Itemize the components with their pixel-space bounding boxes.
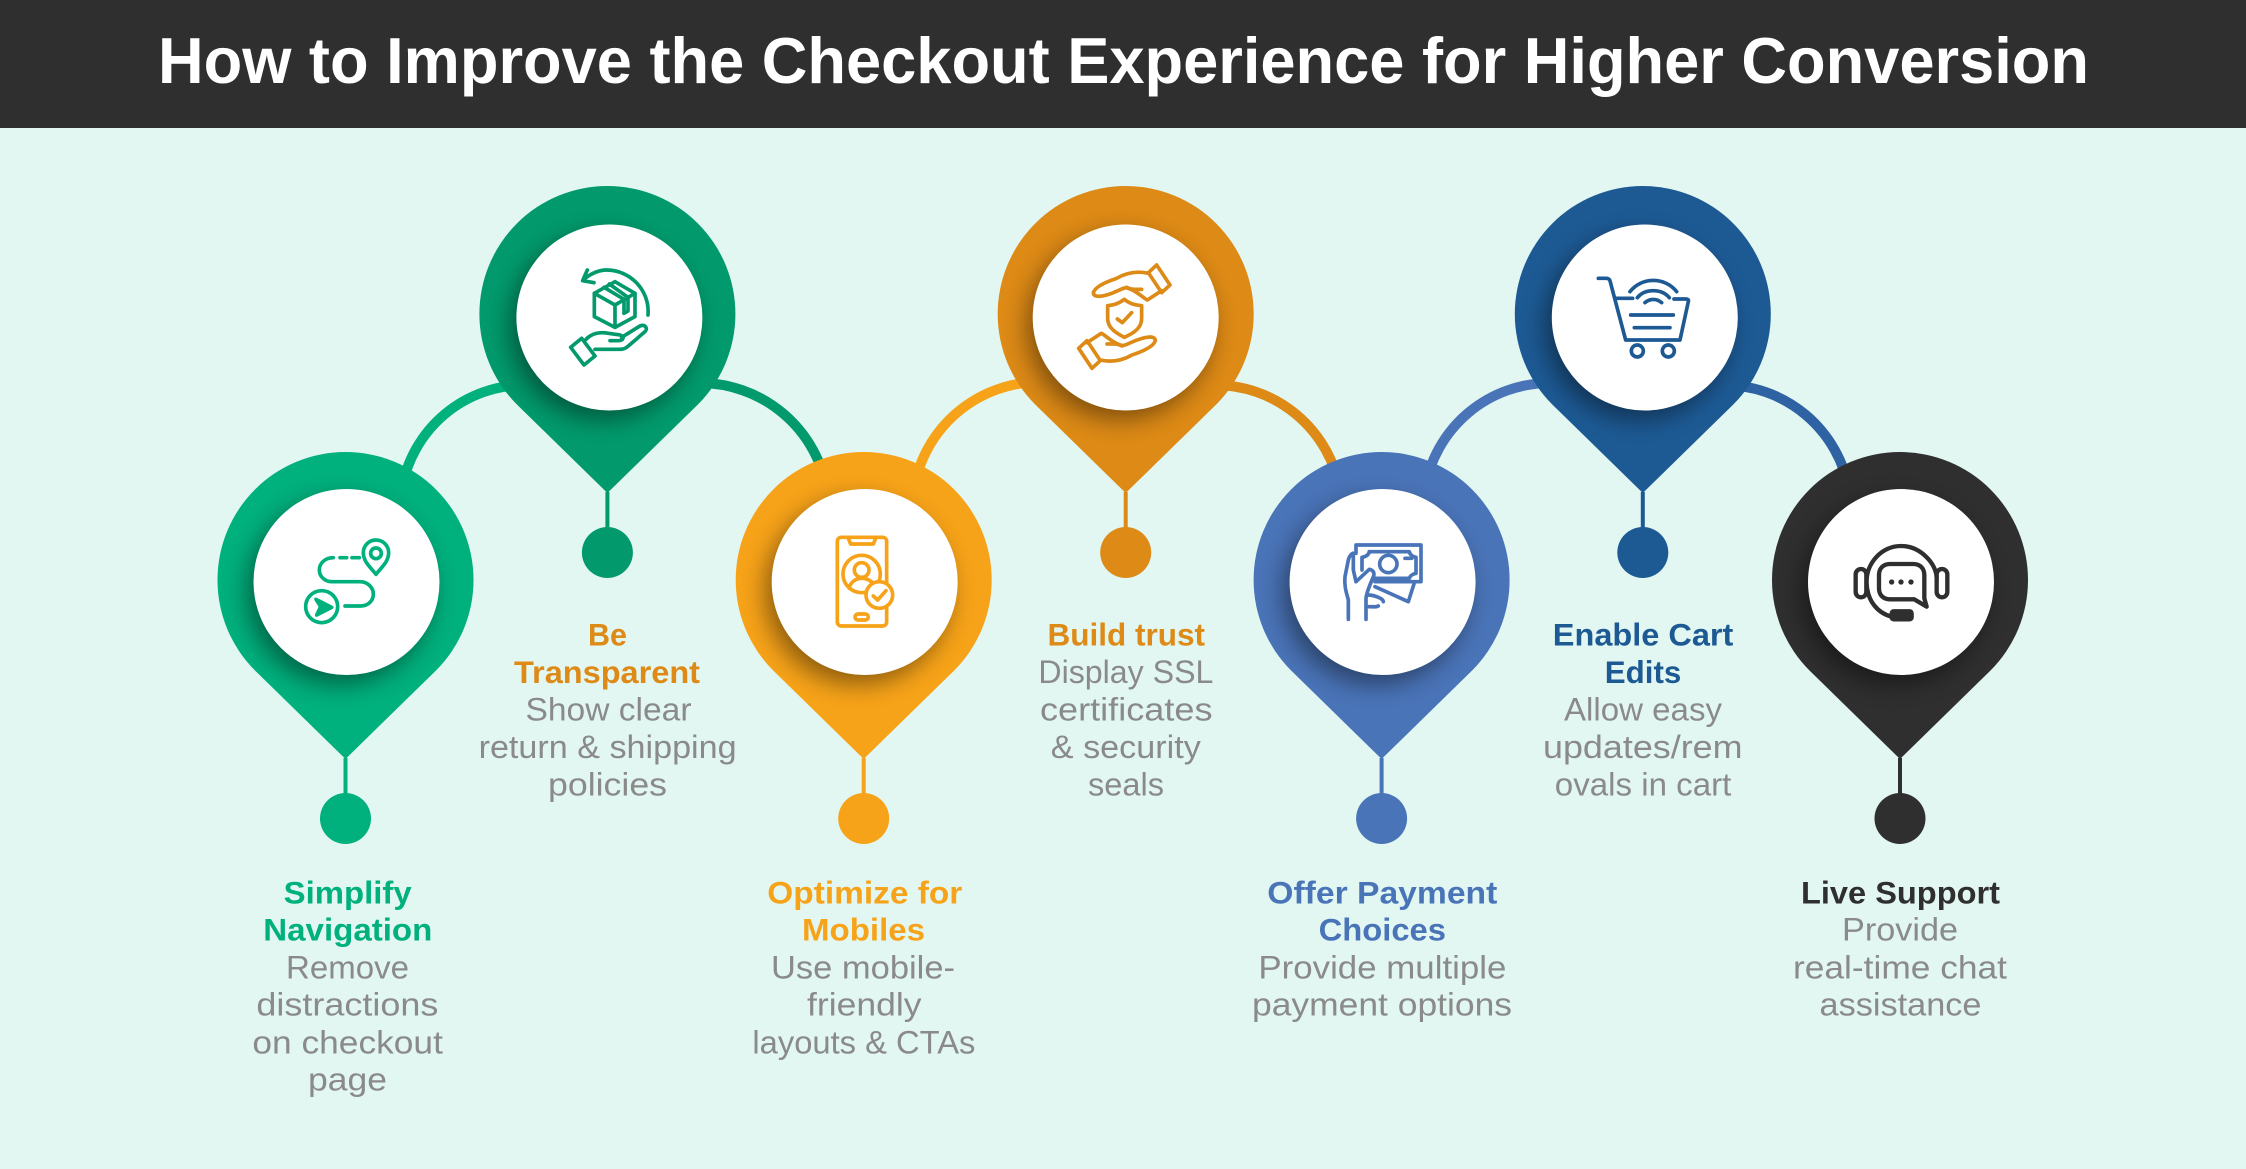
text: Simplify Navigation <box>252 874 443 1098</box>
text: Build trust: Build trust <box>1048 616 1205 652</box>
step 4: Build trust <box>998 186 1254 802</box>
text: Optimize for Mobiles <box>752 874 975 1060</box>
icon: mobile profile check <box>837 537 893 626</box>
step 2: Be Transparent <box>479 186 737 802</box>
icon: hand holding cash <box>1345 545 1421 619</box>
text: Live Support: Provide <box>1842 912 1958 948</box>
text: Optimize for Mobiles: Optimize for <box>767 874 962 910</box>
text: Optimize for Mobiles: Use mobile- <box>771 949 955 985</box>
text: Be Transparent: return & shipping <box>479 729 737 765</box>
pin marker 2 <box>479 186 735 493</box>
stem and dot 5 <box>1356 758 1407 844</box>
text: Enable Cart Edits: Edits <box>1605 654 1681 690</box>
step 7: Live Support <box>1772 452 2028 1023</box>
step 6: Enable Cart Edits <box>1515 186 1771 802</box>
text: Simplify Navigation: page <box>308 1062 387 1098</box>
text: Enable Cart Edits: updates/rem <box>1543 729 1742 765</box>
stem and dot 1 <box>320 758 371 844</box>
pin marker 7 <box>1772 452 2028 759</box>
text: Offer Payment Choices: payment options <box>1252 987 1512 1023</box>
text: Simplify Navigation: distractions <box>256 987 438 1023</box>
text: Be Transparent: Transparent <box>514 654 701 690</box>
text: Live Support: real-time chat <box>1793 949 2007 985</box>
pin marker 6 <box>1515 186 1771 493</box>
stem and dot 6 <box>1617 492 1668 578</box>
text: Simplify Navigation: Simplify <box>284 874 412 910</box>
text: Simplify Navigation: on checkout <box>252 1024 443 1060</box>
pin marker 1 <box>218 452 474 759</box>
text: Optimize for Mobiles: layouts & CTAs <box>752 1024 975 1060</box>
text: Build trust: seals <box>1088 766 1164 802</box>
pin marker 3 <box>736 452 992 759</box>
text: Build trust <box>1038 616 1213 802</box>
text: Offer Payment Choices: Provide multiple <box>1258 949 1506 985</box>
pin marker 4 <box>998 186 1254 493</box>
step 3: Optimize for Mobiles <box>736 452 992 1060</box>
connector arcs <box>402 382 1849 490</box>
icon: hands protecting shield <box>1079 265 1170 368</box>
title banner: How to Improve the Checkout Experience for Higher Conversion <box>158 24 2089 97</box>
text: Build trust: Display SSL <box>1038 654 1213 690</box>
stem and dot 4 <box>1100 492 1151 578</box>
text: Optimize for Mobiles: friendly <box>807 987 922 1023</box>
text: Be Transparent: policies <box>548 766 667 802</box>
text: Build trust: certificates <box>1040 692 1212 728</box>
text: Simplify Navigation: Navigation <box>263 912 432 948</box>
stem and dot 3 <box>838 758 889 844</box>
text: Build trust: & security <box>1051 729 1201 765</box>
step 1: Simplify Navigation <box>218 452 474 1098</box>
text: Enable Cart Edits: ovals in cart <box>1555 766 1731 802</box>
step 5: Offer Payment Choices <box>1252 452 1512 1023</box>
pin marker 5 <box>1254 452 1510 759</box>
text: Offer Payment Choices: Offer Payment <box>1267 874 1498 910</box>
text: Offer Payment Choices <box>1252 874 1512 1023</box>
text: Enable Cart Edits <box>1543 616 1742 802</box>
text: Simplify Navigation: Remove <box>286 949 409 985</box>
icon: route map <box>306 540 389 623</box>
text: Live Support: Live Support <box>1801 874 2001 910</box>
text: Be Transparent <box>479 616 737 802</box>
text: Optimize for Mobiles: Mobiles <box>802 912 925 948</box>
title banner <box>0 0 2246 128</box>
text: Live Support <box>1793 874 2007 1023</box>
text: Offer Payment Choices: Choices <box>1319 912 1446 948</box>
icon: parcel return on hand <box>571 270 648 365</box>
text: Enable Cart Edits: Enable Cart <box>1553 616 1734 652</box>
text: Enable Cart Edits: Allow easy <box>1564 692 1722 728</box>
icon: shopping cart with signal <box>1598 278 1688 357</box>
text: Live Support: assistance <box>1820 987 1982 1023</box>
stem and dot 2 <box>582 492 633 578</box>
icon: headset with chat bubble <box>1856 546 1947 619</box>
stem and dot 7 <box>1874 758 1926 844</box>
text: Be Transparent: Show clear <box>526 692 692 728</box>
text: Be Transparent: Be <box>588 616 627 652</box>
